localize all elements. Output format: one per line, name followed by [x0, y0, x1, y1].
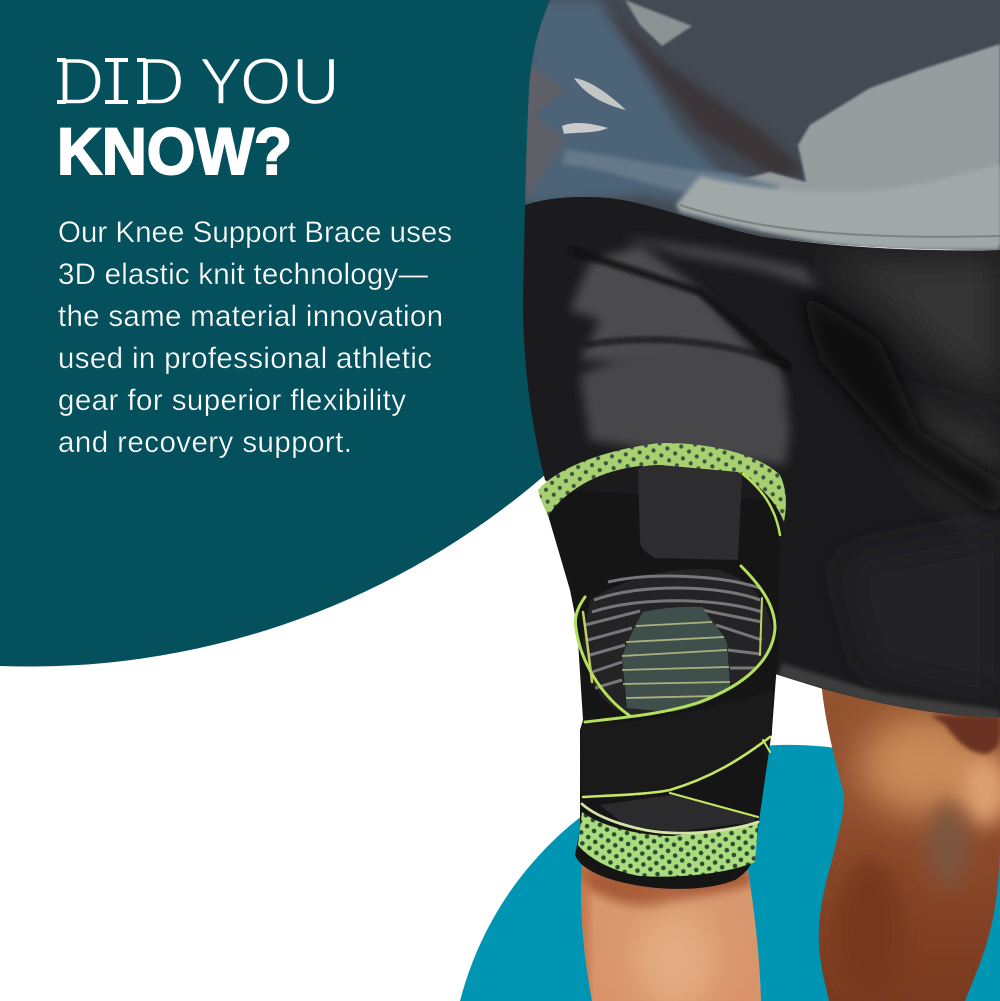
right leg: [810, 670, 1000, 1001]
lower strap: [580, 690, 772, 797]
shorts: [515, 195, 1000, 725]
upper mesh band: [538, 443, 786, 522]
shirt: [515, 0, 1000, 255]
lower band shade: [600, 795, 755, 832]
brace sleeve body: [540, 490, 786, 889]
body text: gear for superior flexibility: [58, 384, 406, 417]
runner photo illustration: [515, 0, 1000, 1001]
heading line: know: KNOW?: [57, 114, 292, 188]
heading: [56, 44, 340, 188]
body text: and recovery support.: [58, 426, 352, 459]
blue circle accent: [460, 745, 1000, 1001]
lower green mesh band: [578, 812, 758, 877]
left leg: [581, 865, 761, 1001]
body text: the same material innovation: [58, 300, 443, 333]
lower straps lines: [582, 737, 770, 833]
green elastic lines: [575, 474, 780, 722]
knee window: [622, 607, 730, 712]
body text: [58, 216, 452, 459]
dark teal circle panel: [0, 0, 809, 667]
velcro pad: [638, 465, 742, 560]
body text: 3D elastic knit technology—: [58, 258, 428, 291]
heading line: did you: DID YOU: [56, 44, 340, 118]
body text: used in professional athletic: [58, 342, 432, 375]
knee brace: [538, 443, 786, 889]
body text: Our Knee Support Brace uses: [58, 216, 452, 249]
striped knee ring: [583, 569, 772, 716]
